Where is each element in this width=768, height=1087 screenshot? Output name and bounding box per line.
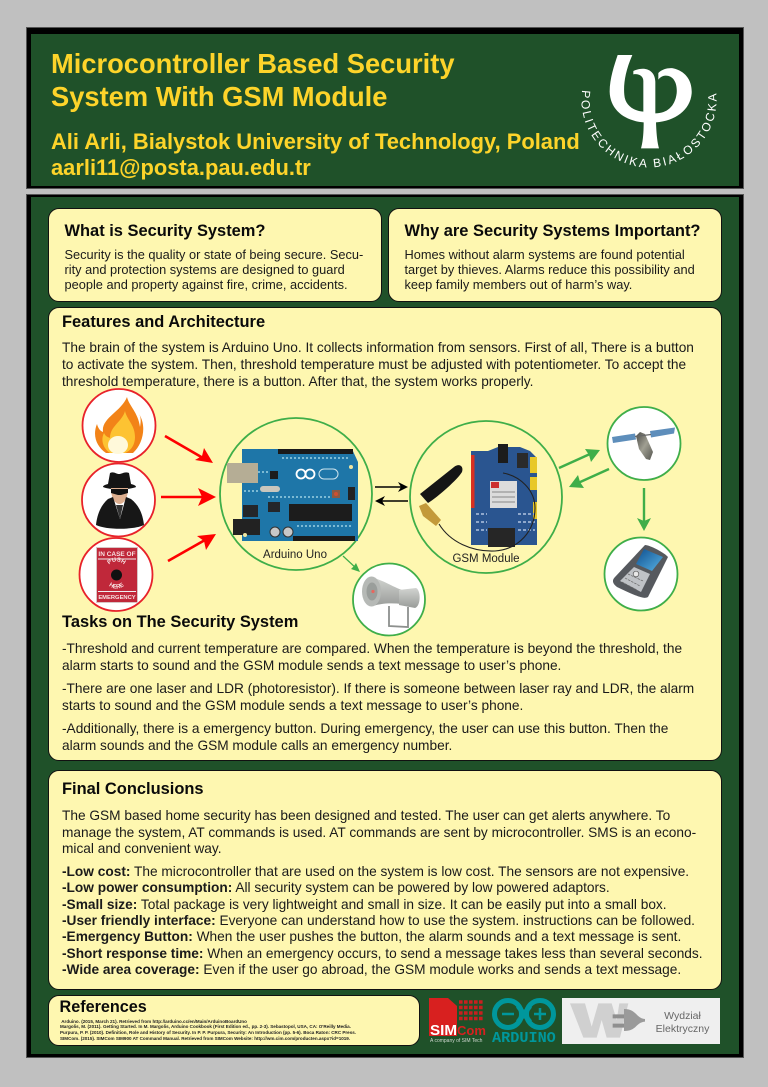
text: reasons (404, 246, 695, 292)
icon: emergency push button: PUSH (106, 557, 126, 564)
logo: Wydział Elektryczny: Elektryczny (656, 1023, 710, 1035)
text: features description (62, 340, 694, 389)
icon: arduino board (220, 418, 372, 570)
arrows: black data link (375, 482, 408, 506)
arrows: green outputs (343, 449, 651, 572)
logo: SIMCom: SIM (430, 1022, 457, 1039)
list: advantages: -Low cost: The microcontroller that are used on the system is low cost. The sensors are not expensive. (62, 864, 689, 879)
list: advantages: -Emergency Button: When the user pushes the button, the alarm sounds and a text message is sent. (62, 929, 681, 944)
heading: final conclusions: Final Conclusions (62, 780, 204, 798)
text: features description: to activate the system. Then, threshold temperature must be adjusted with potentiometer. To accept the (62, 357, 686, 372)
text: task three: alarm sounds and the GSM module calls an emergency number. (62, 738, 452, 753)
icon: satellite (608, 407, 680, 480)
icon: emergency push button: HERE (109, 582, 124, 589)
text: conclusions summary: mical and convenient way. (62, 841, 222, 856)
text: task two: starts to sound and the GSM module sends a text message to user’s phone. (62, 698, 523, 713)
logo: Arduino (492, 1000, 556, 1047)
text: reasons: target by thieves. Alarms reduce this possibility and (404, 262, 695, 277)
text: task three: -Additionally, there is a emergency button. During emergency, the user can use this button. Then the (62, 721, 668, 736)
text: task one (62, 641, 682, 673)
text: reasons: Homes without alarm systems are found potential (404, 246, 685, 262)
logo: SIMCom: A company of SIM Tech (430, 1038, 483, 1044)
text: reference list: Margolis, M. (2011). Getting Started. In M. Margolis, Arduino Cookbook (First Edition ed., pp. 2-3). Sebastopol, USA, CA: O'Reilly Media. (60, 1024, 351, 1029)
icon: mobile phone (604, 538, 678, 610)
heading: why important: Why are Security Systems Important? (404, 222, 700, 240)
main body panel (26, 194, 744, 1058)
panel: why security systems important (388, 208, 722, 302)
heading: what is security system: What is Security System? (64, 222, 265, 240)
text: definition: Security is the quality or state of being secure. Secu- (64, 246, 363, 262)
text: definition: people and property against fire, crime, accidents. (64, 277, 348, 292)
text: conclusions summary: The GSM based home security has been designed and tested. The user can get alerts anywhere. To (62, 808, 670, 823)
text: conclusions summary (62, 808, 696, 856)
logo: Wydział Elektryczny: Wydział (664, 1010, 701, 1022)
icon: thief (82, 464, 155, 536)
icon: fire (82, 389, 156, 462)
text: reasons: keep family members out of harm’s way. (404, 277, 632, 292)
text: features description: threshold temperature, there is a button. After that, the system works properly. (62, 374, 533, 389)
panel: what is security system (48, 208, 382, 302)
logo: Wydział Elektryczny (562, 998, 720, 1044)
text: task one: -Threshold and current temperature are compared. When the temperature is beyond the threshold, the (62, 641, 682, 656)
icon: emergency push button (78, 537, 154, 612)
text: features description: The brain of the system is Arduino Uno. It collects information from sensors. First of all, There is a button (62, 340, 694, 355)
text: definition (64, 246, 363, 292)
authors and affiliation: Ali Arli, Bialystok University of Technology, Poland (51, 129, 580, 154)
text: reference list: SIMCom. (2015). SIMCom SIM900 AT Command Manual. Retrieved from SIMCom Website: http://wm.cim.com/producten.aspx?id=1019. (60, 1036, 350, 1041)
icon: alarm horn (353, 564, 425, 636)
author email: aarli11@posta.pau.edu.tr (51, 155, 311, 180)
text: reference list (60, 1018, 356, 1041)
text: task two (62, 681, 694, 713)
list: advantages: -Low power consumption: All security system can be powered by low powered adaptors. (62, 880, 610, 895)
panel: features and tasks (48, 307, 722, 761)
logo: SIMCom (429, 998, 486, 1044)
text: reference list: Arduino. (2015, March 21). Retrieved from http://arduino.cc/en/Main/ArduinoBoardUno (61, 1018, 247, 1024)
heading: features and architecture: Features and Architecture (62, 313, 265, 331)
panel: references (48, 995, 420, 1046)
list: advantages (62, 864, 703, 977)
logo: Arduino: ARDUINO (492, 1029, 556, 1047)
logo: SIMCom: Com (457, 1023, 486, 1038)
poster title (51, 48, 455, 112)
icon: emergency push button: IN CASE OF (98, 551, 136, 558)
list: advantages: -Small size: Total package is very lightweight and small in size. It can be easily put into a small box. (62, 897, 667, 912)
text: conclusions summary: manage the system, AT commands is used. AT commands are sent by microcontroller. SMS is an econo- (62, 825, 696, 840)
text: task three (62, 721, 668, 753)
arrows: red inputs (161, 436, 216, 561)
icon: gsm module (410, 421, 562, 573)
panel: final conclusions (48, 770, 722, 990)
text: task two: -There are one laser and LDR (photoresistor). If there is someone between laser ray and LDR, the alarm (62, 681, 694, 696)
icon: gsm module: GSM Module (452, 553, 520, 565)
poster title: Microcontroller Based Security (51, 48, 455, 79)
text: reference list: Purpura, P. P. (2010). Definition, Role and History of Security. In P. P. Purpura, Security: An Introduction (pp. 5-6). Boca Raton: CRC Press. (60, 1030, 356, 1035)
icon: arduino board: Arduino Uno (263, 549, 327, 561)
text: definition: rity and protection systems are designed to guard (64, 262, 345, 277)
icon: emergency push button: EMERGENCY (98, 595, 136, 601)
heading: references: References (60, 998, 147, 1016)
text: task one: alarm starts to sound and the GSM module sends a text message to user’s phone. (62, 658, 561, 673)
list: advantages: -User friendly interface: Everyone can understand how to use the system. instructions can be followed. (62, 913, 695, 928)
list: advantages: -Short response time: When an emergency occurs, to send a message takes less than several seconds. (62, 946, 703, 961)
university logo: POLITECHNIKA BIAŁOSTOCKA (581, 90, 717, 168)
header panel (26, 27, 744, 189)
heading: tasks on the security system: Tasks on The Security System (62, 612, 298, 630)
poster title: System With GSM Module (51, 81, 387, 112)
list: advantages: -Wide area coverage: Even if the user go abroad, the GSM module works and sends a text message. (62, 962, 681, 977)
